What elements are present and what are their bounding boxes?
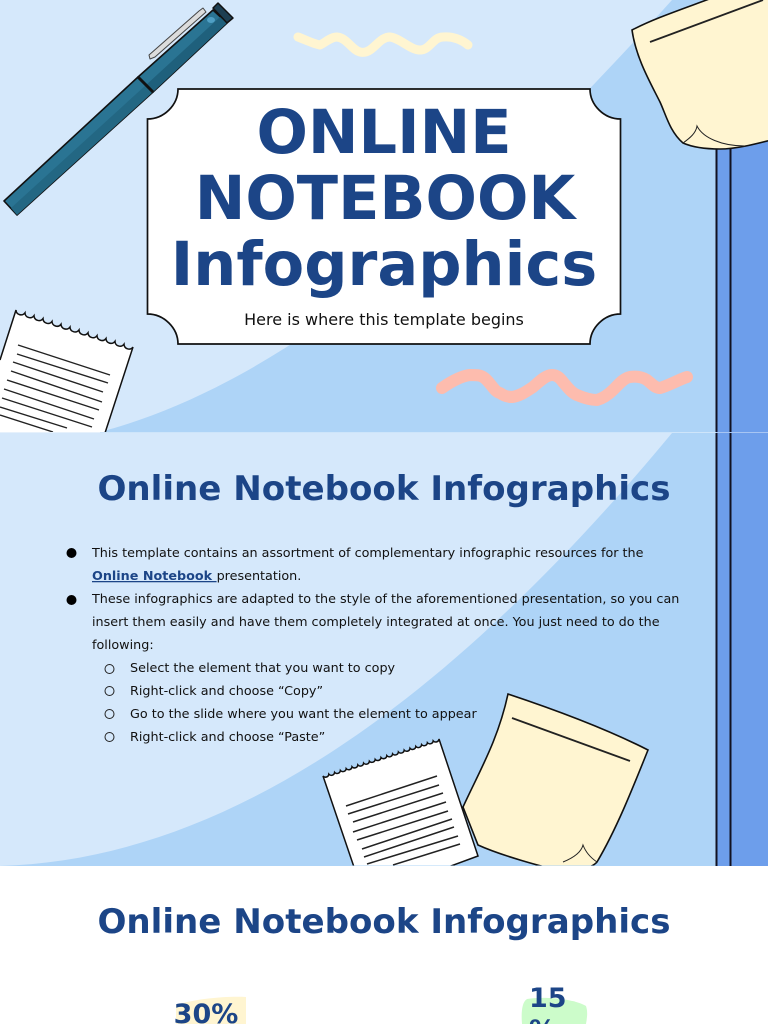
heading: slide 3: Online Notebook Infographics [97,902,671,942]
slide 2 background [0,432,768,866]
subtitle: Here is where this template begins [244,310,524,329]
text block: bullets: Go to the slide where you want the element to appear [130,707,477,722]
panel: title card [148,89,620,344]
text block: bullets: following: [92,638,154,653]
title: Infographics [171,230,597,300]
title: ONLINE [256,98,512,168]
icon: yellow note slide 2 [463,694,648,871]
icon: torn note slide 2 [323,739,478,870]
decorative squiggle: pink [442,375,687,400]
text block: bullets: insert them easily and have them completely integrated at once. You just need to do the [92,615,660,630]
icon: pen [4,3,233,215]
icon: yellow note top right [632,0,768,149]
text block: bullets: Online Notebook presentation. [92,569,301,584]
heading: slide 2: Online Notebook Infographics [97,469,671,509]
title [171,98,597,300]
text block: bullets: Right-click and choose “Copy” [130,684,323,699]
stat blob: 15%: 15 [529,983,567,1014]
icon: torn note left [0,310,133,433]
text block: bullets [66,546,679,745]
stat blob: 15% [522,983,587,1024]
text block: bullets: Select the element that you want to copy [130,661,396,676]
text block: bullets: These infographics are adapted to the style of the aforementioned presentation, so you can [91,592,679,607]
slide 1 background [0,0,768,433]
decorative squiggle: yellow [298,37,468,52]
text block: bullets: This template contains an assortment of complementary infographic resources for the [91,546,644,561]
title: NOTEBOOK [195,164,577,234]
text block: bullets: Right-click and choose “Paste” [130,730,325,745]
